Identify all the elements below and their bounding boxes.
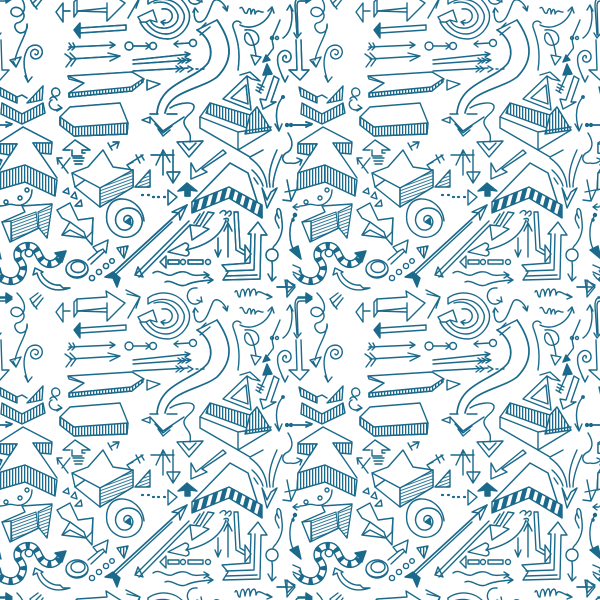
hatched chevron [1, 103, 45, 124]
arrow: fat down-left double [190, 212, 214, 240]
hatched mini triangle [117, 246, 128, 258]
small triangles [63, 188, 82, 206]
arrow: filled head long [74, 23, 126, 38]
small spiral with arrows [49, 88, 62, 111]
small arrow tick [142, 117, 150, 123]
arrow: rocket down-left [260, 76, 279, 109]
arrow: dotted squiggle with filled head [263, 20, 280, 62]
arrow: cross pointer [283, 180, 296, 201]
cross up line [151, 150, 174, 175]
curved double arrow [33, 268, 70, 290]
arrows: group of three long [133, 52, 204, 72]
3D chevron box [200, 103, 271, 150]
wavy arrows [153, 271, 213, 286]
arrow: thin fletched [68, 42, 115, 50]
top of star chevron [238, 150, 263, 157]
L arrow [234, 212, 251, 262]
crown arrow [57, 203, 93, 245]
arrow: loop with triangle head [240, 7, 274, 65]
X wedges [0, 86, 43, 103]
arrow: circle pointing left [174, 40, 196, 47]
arrow: small spiral [24, 45, 42, 82]
big swoop arrow [150, 20, 229, 136]
arrow: thin fletched two [65, 53, 120, 67]
spiral circle [107, 199, 144, 237]
arrow: spiral right [278, 50, 291, 82]
arrow: long S curve [233, 21, 241, 70]
arrow: fern with head [250, 150, 282, 208]
inner L lines [226, 234, 257, 276]
large star arrow [0, 127, 57, 196]
star arrow repeat at tile edge [297, 144, 325, 190]
snake arrow [0, 246, 66, 281]
arrow: circle to circle [125, 42, 156, 50]
arrow: dotted curve filled head [290, 214, 301, 259]
long fletched arrow [105, 205, 187, 287]
arrow: curved with dot [275, 96, 284, 131]
arrow: down with head [167, 150, 180, 183]
cross arrow small [57, 142, 119, 173]
small triangle 2 [125, 218, 131, 225]
triple chevrons [30, 0, 43, 9]
triangle with stem lower [277, 280, 295, 297]
curly arrow pair [187, 0, 228, 22]
arrow: filled head bent [294, 0, 312, 38]
arrow: triangle head hatched stem [256, 64, 272, 93]
arrow: curly coil [10, 0, 27, 67]
3D star arrow [72, 150, 133, 207]
chevron house [192, 163, 262, 218]
long double arrow [135, 221, 190, 277]
arrow: thin angled [126, 0, 140, 18]
spiral target [138, 0, 189, 39]
filled small arrow [0, 0, 12, 1]
squiggle with triangle arrow [170, 103, 203, 157]
spring coil two [240, 7, 263, 14]
block shape: hatched pentagon [60, 103, 128, 136]
banner arrow [68, 72, 144, 97]
big L arrow [222, 222, 267, 280]
arrow: heart tail [168, 211, 231, 256]
wavy arrow with dots [0, 188, 32, 210]
ring arrow [66, 240, 108, 278]
down arrow small [215, 238, 221, 257]
arrow: triangle with stem [56, 3, 70, 22]
arrow: tall hollow down [289, 40, 309, 80]
block arrow: top right-pointing [74, 0, 125, 21]
arrow: dotted filled [286, 122, 312, 127]
triangle arrow [223, 72, 260, 110]
triangle [147, 80, 160, 90]
hollow up arrow [63, 140, 90, 164]
filled up arrow [178, 183, 197, 196]
block arrow 3D [2, 204, 52, 242]
arrow: loop down [266, 209, 282, 281]
cross arrow right [127, 155, 144, 170]
arrow: up with curve [283, 5, 293, 38]
up arrow small [224, 223, 232, 257]
arrow: squiggle [283, 133, 302, 165]
dots and triangle [142, 190, 177, 205]
dash row [160, 256, 210, 268]
fat arrow down-left [191, 150, 226, 179]
dots chain [89, 259, 114, 281]
pattern tile [0, 0, 325, 297]
hatched small triangle right [135, 170, 150, 187]
